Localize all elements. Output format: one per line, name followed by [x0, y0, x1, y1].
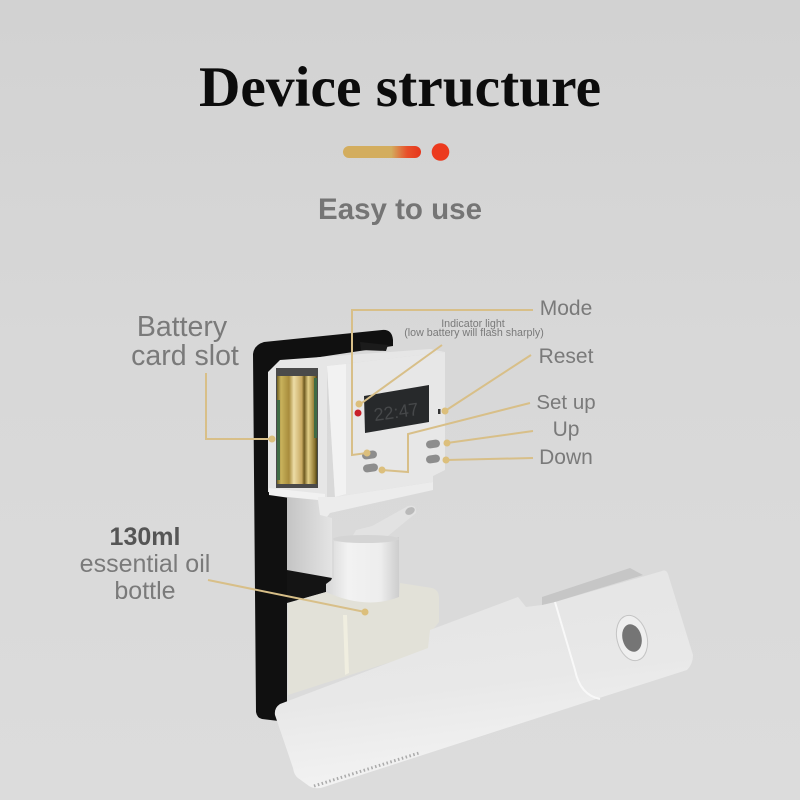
callout leaders	[206, 310, 533, 612]
control module	[318, 352, 445, 517]
label: up: Up	[553, 418, 579, 441]
title: Device structure	[199, 56, 601, 119]
label: down: Down	[539, 446, 593, 469]
front cover	[275, 568, 693, 788]
label: indicator light: (low battery will flash sharply)	[404, 327, 544, 339]
nozzle	[352, 506, 416, 541]
leader: mode	[352, 310, 533, 455]
label: battery card slot	[131, 311, 239, 372]
label: indicator light	[404, 318, 544, 339]
label: battery card slot: Battery	[137, 311, 228, 343]
leader: battery card slot	[206, 373, 272, 439]
callout dots	[268, 400, 450, 616]
leader: up	[447, 431, 533, 443]
black back panel	[253, 330, 393, 722]
LCD screen	[364, 385, 429, 433]
subtitle: Easy to use	[318, 193, 482, 226]
sensor window	[612, 612, 652, 664]
right buttons	[426, 439, 440, 464]
oil bottle	[288, 583, 439, 695]
vent holes	[314, 753, 419, 786]
leader: set up	[382, 403, 530, 472]
leader: indicator light	[359, 345, 442, 405]
leader: oil bottle	[208, 580, 365, 612]
label: battery card slot: card slot	[131, 340, 239, 372]
top cap detail	[360, 342, 388, 351]
time readout: 22:47	[372, 399, 420, 425]
accent bar and dot	[343, 143, 449, 161]
battery compartment	[268, 349, 445, 503]
device illustration	[253, 330, 693, 788]
pump cylinder	[326, 535, 399, 604]
label: set up: Set up	[536, 391, 596, 414]
label: reset: Reset	[539, 345, 594, 368]
label: indicator light: Indicator light	[441, 318, 505, 330]
leader: reset	[445, 355, 531, 411]
leader: down	[446, 458, 533, 460]
label: essential oil bottle: bottle	[114, 577, 176, 605]
left buttons	[362, 450, 378, 473]
label: essential oil bottle: 130ml	[110, 523, 180, 551]
reset hole	[438, 409, 440, 414]
label: mode: Mode	[540, 297, 592, 320]
label: essential oil bottle: essential oil	[80, 550, 210, 578]
indicator LED	[354, 410, 362, 416]
label: essential oil bottle	[80, 523, 210, 605]
pump housing	[287, 497, 332, 578]
